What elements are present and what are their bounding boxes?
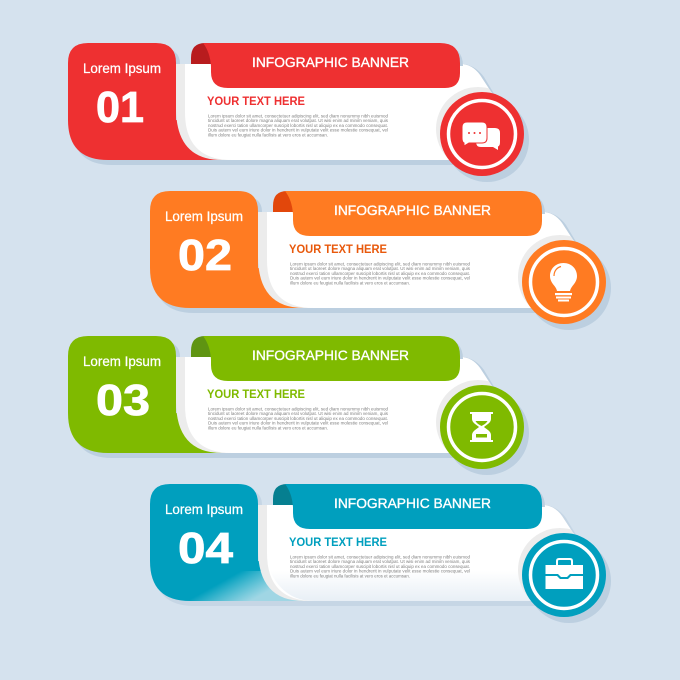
header text: INFOGRAPHIC BANNER — [252, 348, 409, 363]
label: Lorem Ipsum — [83, 61, 161, 76]
body text: nostrud exerci tation ullamcorper suscipit lobortis nisl ut aliquip ex ea commodo consequat. — [208, 416, 388, 421]
body text — [208, 114, 389, 137]
number tab — [68, 336, 176, 453]
body text: Lorem ipsum dolor sit amet, consectetuer adipiscing elit, sed diam nonummy nibh euismod — [208, 406, 388, 412]
banner header — [440, 338, 463, 359]
banner 4: teal — [150, 484, 611, 623]
white panel — [176, 357, 495, 453]
label: Lorem Ipsum — [83, 354, 161, 369]
header text: INFOGRAPHIC BANNER — [334, 203, 491, 218]
banner 1: red — [68, 43, 529, 182]
body text: illum dolore eu feugiat nulla facilisis at vero eros et accumsan. — [290, 573, 410, 578]
body text: tincidunt ut laoreet dolore magna aliquam erat volutpat. Ut wisi enim ad minim veniam, quis — [208, 411, 389, 416]
body text: Duis autem vel eum iriure dolor in hendrerit in vulputate velit esse molestie consequat, vel — [208, 128, 388, 133]
bottom fade on tab — [162, 571, 317, 601]
number: 03 — [96, 376, 150, 425]
body text: nostrud exerci tation ullamcorper suscipit lobortis nisl ut aliquip ex ea commodo consequat. — [290, 271, 470, 276]
banner header — [522, 193, 545, 214]
white panel — [258, 212, 577, 308]
body text — [290, 554, 471, 578]
number: 01 — [96, 83, 144, 132]
banner header — [440, 45, 463, 66]
subheading: YOUR TEXT HERE — [207, 389, 305, 401]
body text: Duis autem vel eum iriure dolor in hendrerit in vulputate velit esse molestie consequat, vel — [290, 276, 470, 281]
banner 3: green — [68, 336, 529, 475]
number tab — [150, 191, 258, 308]
white panel — [258, 505, 577, 601]
body text: illum dolore eu feugiat nulla facilisis at vero eros et accumsan. — [290, 280, 410, 285]
icon circle: briefcase — [518, 528, 611, 623]
header text: INFOGRAPHIC BANNER — [252, 55, 409, 70]
white panel — [176, 64, 495, 160]
drop shadow — [154, 196, 581, 313]
bottom fade on panel — [270, 571, 577, 601]
body text: Lorem ipsum dolor sit amet, consectetuer adipiscing elit, sed diam nonummy nibh euismod — [208, 114, 388, 118]
body text: illum dolore eu feugiat nulla facilisis at vero eros et accumsan. — [208, 425, 328, 430]
banner header — [522, 486, 545, 507]
label: Lorem Ipsum — [165, 209, 243, 224]
body text: tincidunt ut laoreet dolore magna aliquam erat volutpat. Ut wisi enim ad minim veniam, quis — [208, 118, 389, 123]
body text: tincidunt ut laoreet dolore magna aliquam erat volutpat. Ut wisi enim ad minim veniam, quis — [290, 266, 471, 271]
body text — [290, 262, 471, 285]
subheading: YOUR TEXT HERE — [289, 244, 387, 256]
number: 02 — [178, 231, 232, 280]
label: Lorem Ipsum — [165, 502, 243, 517]
body text: Lorem ipsum dolor sit amet, consectetuer adipiscing elit, sed diam nonummy nibh euismod — [290, 262, 470, 266]
subheading: YOUR TEXT HERE — [289, 537, 387, 549]
drop shadow — [72, 48, 499, 165]
number: 04 — [178, 524, 234, 573]
subheading: YOUR TEXT HERE — [207, 96, 305, 108]
body text: Duis autem vel eum iriure dolor in hendrerit in vulputate velit esse molestie consequat, vel — [208, 421, 388, 426]
header text: INFOGRAPHIC BANNER — [334, 496, 491, 511]
banner 2: orange — [150, 191, 611, 330]
body text: tincidunt ut laoreet dolore magna aliquam erat volutpat. Ut wisi enim ad minim veniam, quis — [290, 559, 471, 564]
icon circle: light bulb — [518, 235, 611, 330]
body text: Duis autem vel eum iriure dolor in hendrerit in vulputate velit esse molestie consequat, vel — [290, 569, 470, 574]
drop shadow — [154, 489, 581, 606]
icon circle: chat bubbles — [436, 87, 529, 182]
body text: nostrud exerci tation ullamcorper suscipit lobortis nisl ut aliquip ex ea commodo consequat. — [290, 564, 470, 569]
body text: Lorem ipsum dolor sit amet, consectetuer adipiscing elit, sed diam nonummy nibh euismod — [290, 554, 470, 560]
body text: illum dolore eu feugiat nulla facilisis at vero eros et accumsan. — [208, 132, 328, 137]
number tab — [68, 43, 176, 160]
body text: nostrud exerci tation ullamcorper suscipit lobortis nisl ut aliquip ex ea commodo consequat. — [208, 123, 388, 128]
body text — [208, 406, 389, 430]
drop shadow — [72, 341, 499, 458]
icon circle: hourglass — [436, 380, 529, 475]
number tab — [150, 484, 258, 601]
